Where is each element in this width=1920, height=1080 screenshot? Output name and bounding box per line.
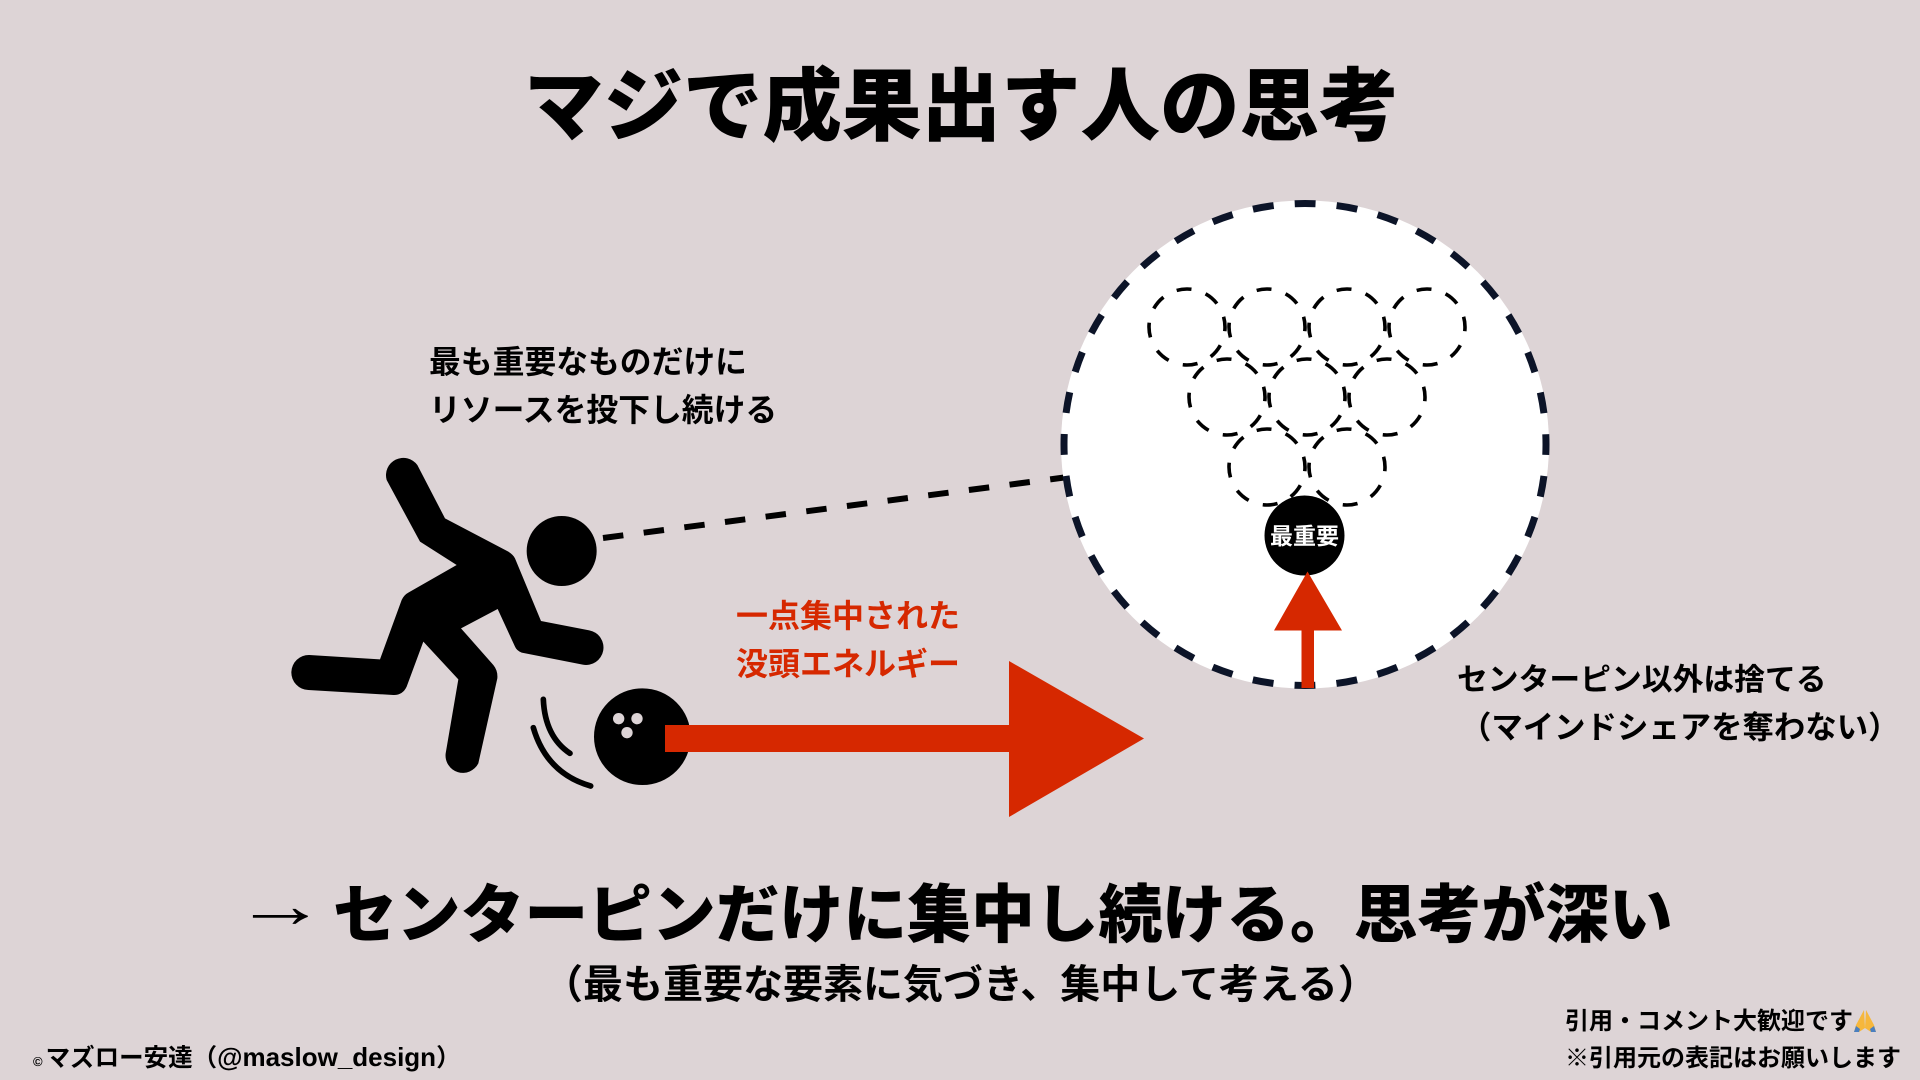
text: citation note: ※引用元の表記はお願いします: [1565, 1045, 1901, 1072]
text: red focused energy label: 一点集中された: [736, 598, 960, 634]
text: resource focus note: 最も重要なものだけに: [429, 344, 747, 380]
icon: bowling ball with motion lines: [533, 688, 691, 786]
panel: zoomed circle with pins: [1061, 200, 1549, 688]
text: copyright credit: ©マズロー安達（@maslow_design）: [33, 1042, 461, 1072]
text: discard other pins note: [1457, 662, 1899, 745]
text: discard other pins note: （マインドシェアを奪わない）: [1460, 710, 1899, 745]
heading: conclusion: センターピンだけに集中し続ける。思考が深い: [333, 879, 1673, 951]
dashed sight line from head to circle: [603, 477, 1068, 538]
text: conclusion note: （最も重要な要素に気づき、集中して考える）: [543, 963, 1378, 1007]
text: red focused energy label: [736, 598, 960, 682]
pins: dashed outlines: [1149, 289, 1465, 505]
text: red focused energy label: 没頭エネルギー: [736, 646, 960, 682]
text: discard other pins note: センターピン以外は捨てる: [1457, 662, 1827, 697]
arrow: large red energy arrow: [665, 661, 1144, 817]
text: citation note: [1565, 1008, 1901, 1072]
arrow: red arrow pointing at center pin: [1274, 572, 1342, 688]
icon: bowler figure: [291, 458, 603, 773]
text: resource focus note: リソースを投下し続ける: [429, 392, 777, 428]
text: conclusion arrow: →: [234, 869, 327, 941]
text: resource focus note: [429, 344, 777, 428]
center pin labelled most important: [1264, 496, 1344, 576]
center pin labelled most important: 最重要: [1270, 523, 1339, 549]
text: citation note: 引用・コメント大歓迎です: [1565, 1008, 1853, 1035]
title: マジで成果出す人の思考: [524, 62, 1398, 151]
